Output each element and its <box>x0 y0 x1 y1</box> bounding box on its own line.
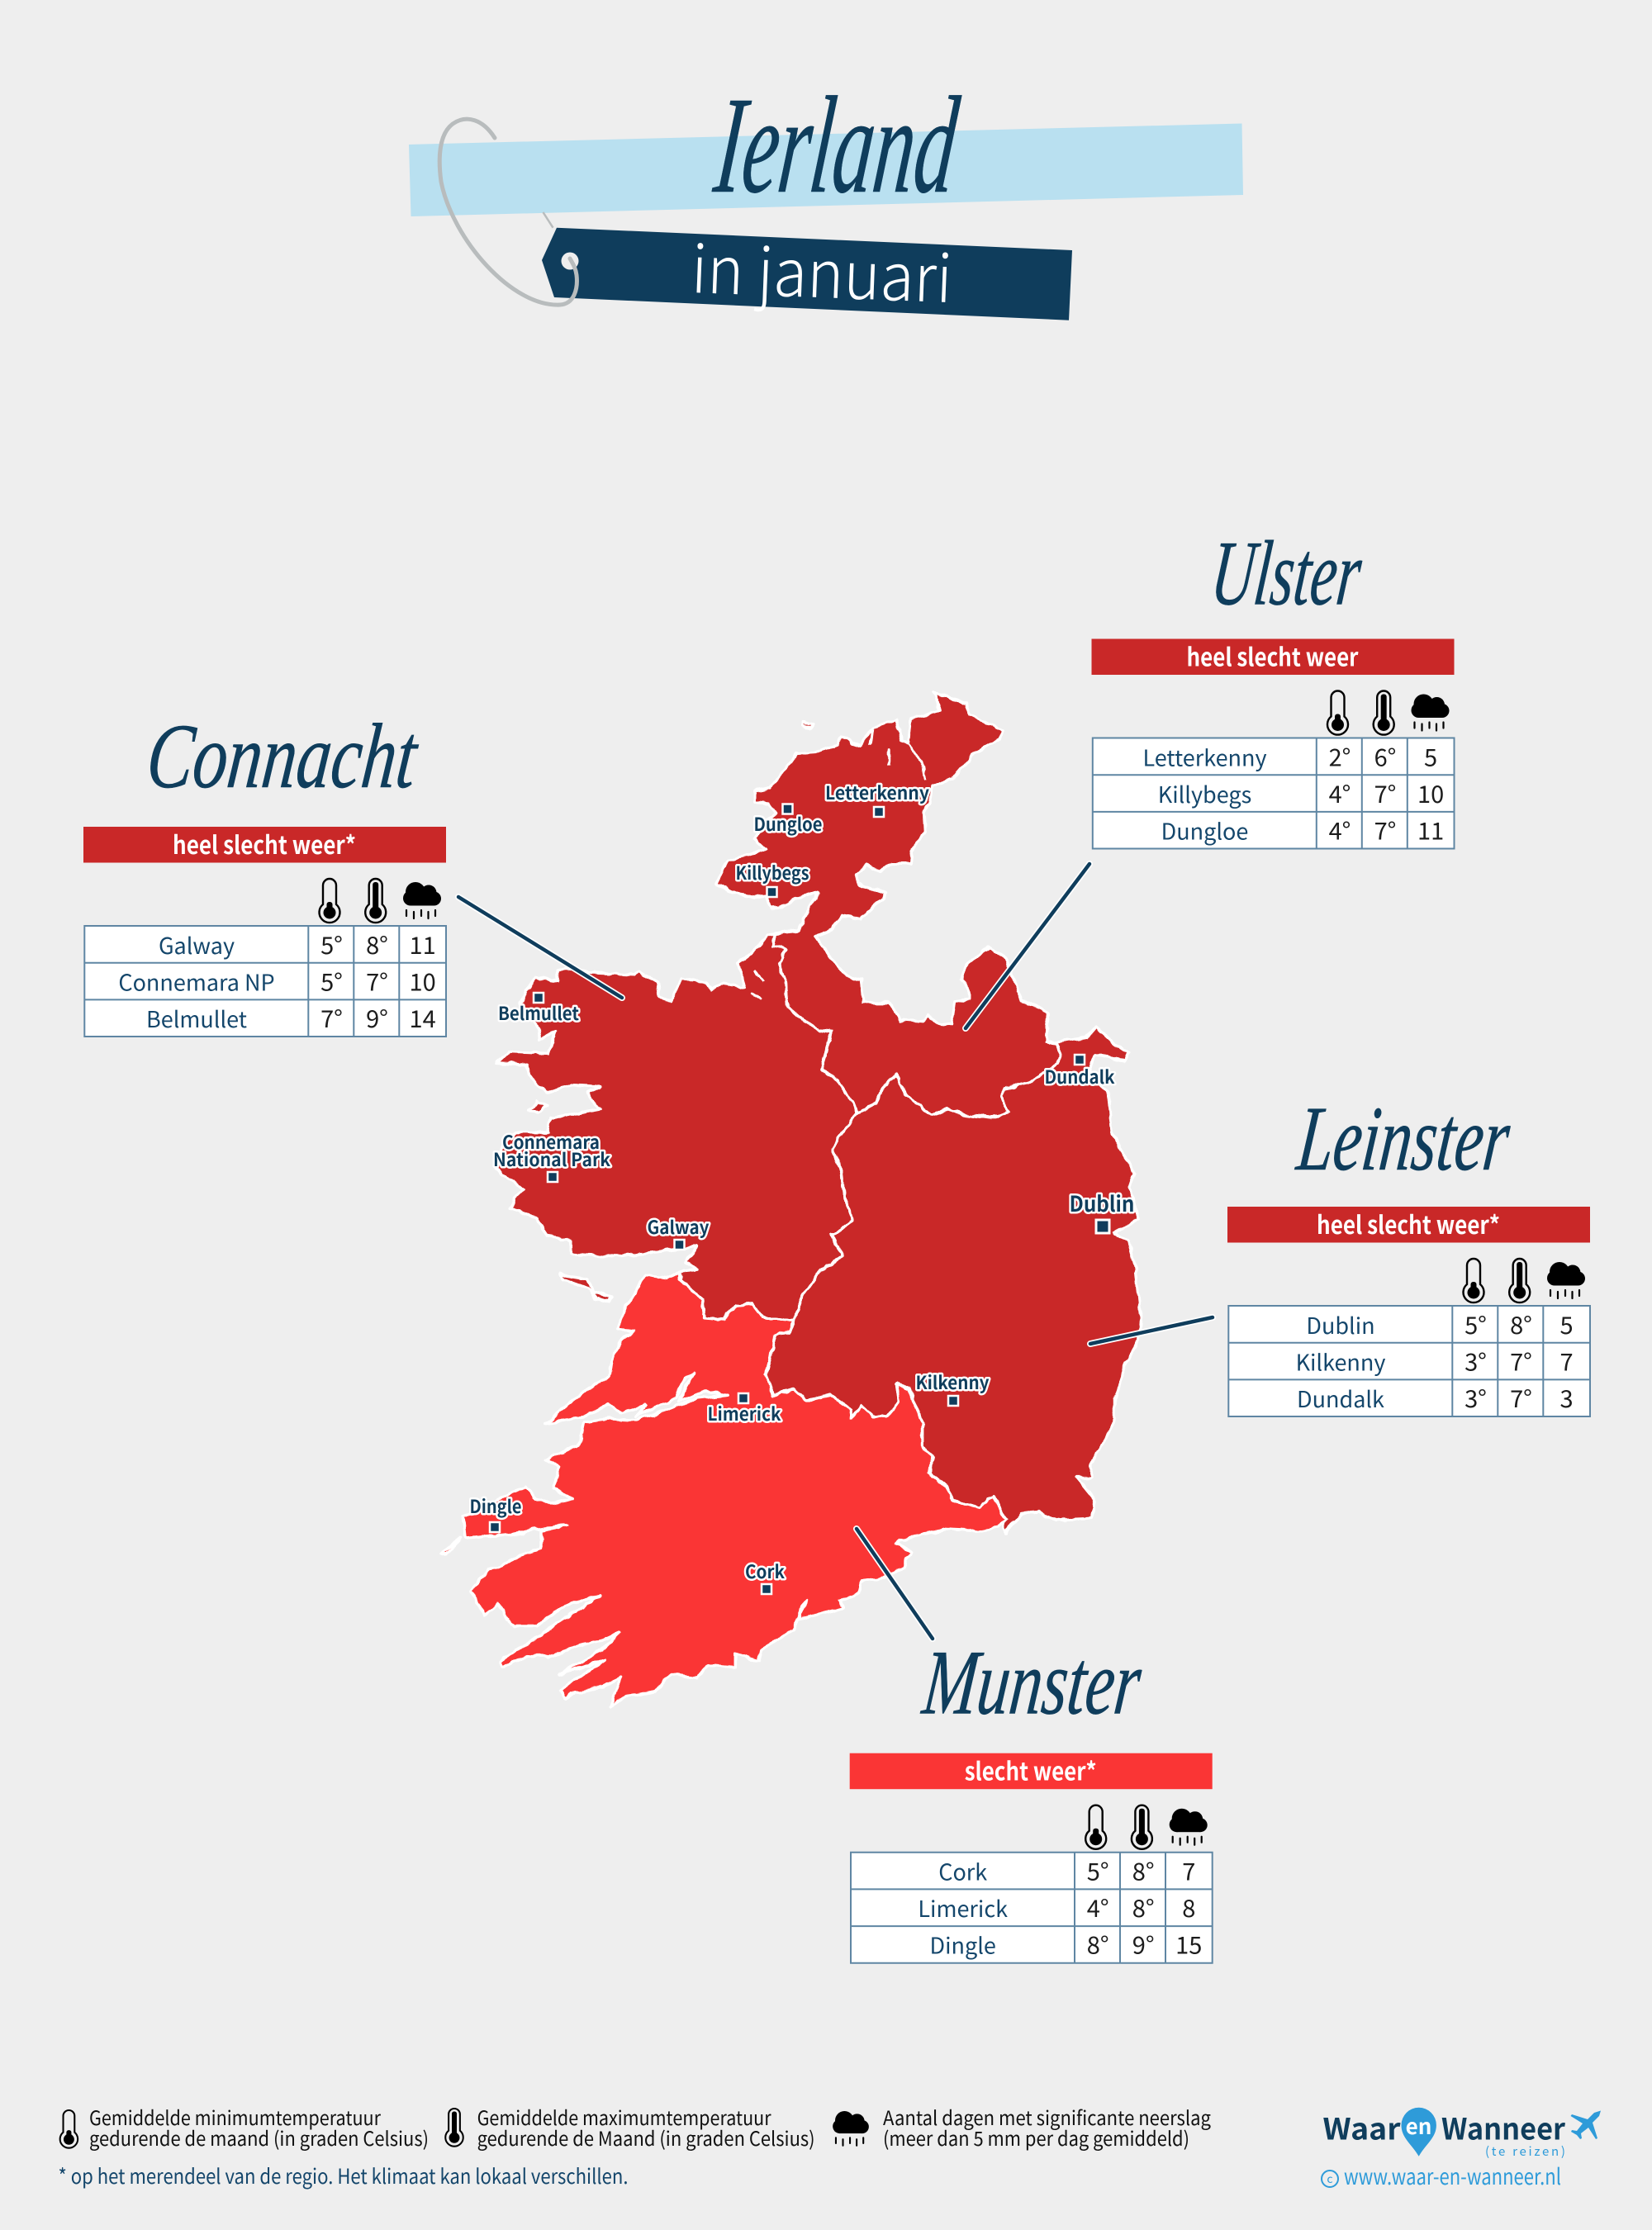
climate table: Galway <box>159 928 235 961</box>
label: Killybegs: Killybegs <box>735 859 809 885</box>
icon: max temperature <box>1374 690 1394 735</box>
marker: Cork <box>762 1584 771 1594</box>
label: Connemara National Park: National Park <box>493 1146 611 1172</box>
climate table: 5° <box>320 963 343 998</box>
callout line: Munster <box>857 1529 933 1639</box>
climate table: 7° <box>1510 1380 1532 1415</box>
climate table: 3° <box>1464 1343 1487 1378</box>
heading: Ulster: Ulster <box>1207 523 1367 624</box>
marker: Kilkenny <box>948 1396 958 1406</box>
marker: Killybegs <box>767 887 776 897</box>
icon: max temperature <box>1509 1259 1530 1302</box>
climate table: 8° <box>1510 1307 1532 1341</box>
Aran islands <box>560 1274 612 1302</box>
label: Belmullet: Belmullet <box>498 999 579 1026</box>
callout line: Connacht <box>458 897 622 998</box>
climate table: 9° <box>1132 1927 1155 1962</box>
region: Ulster <box>716 692 1061 1118</box>
Clare island <box>529 1101 547 1112</box>
legend text: min temperature: gedurende de maand (in graden Celsius) <box>89 2123 429 2152</box>
label: Dungloe: Dungloe <box>753 810 823 837</box>
climate table: Limerick <box>918 1891 1008 1924</box>
banner: weather rating <box>850 1752 1213 1789</box>
climate table: Dungloe <box>1161 814 1248 846</box>
climate table: 4° <box>1329 813 1351 847</box>
icon: rain <box>403 882 441 918</box>
climate table: 5° <box>1464 1307 1487 1341</box>
climate table: 7 <box>1560 1343 1574 1378</box>
region: Connacht <box>494 933 857 1320</box>
footnote: * op het merendeel van de regio. Het klimaat kan lokaal verschillen. <box>58 2161 628 2190</box>
climate table: 15 <box>1175 1927 1202 1962</box>
climate table: 6° <box>1374 738 1396 773</box>
region: Leinster <box>767 1027 1141 1533</box>
region: Munster <box>463 1271 1007 1706</box>
climate table: Dingle <box>930 1929 996 1961</box>
label: Connemara National Park <box>493 1128 611 1172</box>
climate table: 10 <box>1417 776 1444 810</box>
banner: weather rating <box>1227 1205 1590 1242</box>
marker: Galway <box>674 1240 684 1250</box>
icon: min temperature <box>1085 1805 1106 1849</box>
label: Dundalk: Dundalk <box>1044 1063 1115 1089</box>
icon: min temperature <box>319 879 340 923</box>
climate table: Dundalk <box>1297 1382 1384 1414</box>
climate table: 9° <box>366 1000 388 1035</box>
climate table <box>1228 1306 1590 1416</box>
label: Dingle: Dingle <box>469 1492 522 1519</box>
climate table: Connemara NP <box>118 965 275 998</box>
label: Limerick: Limerick <box>707 1400 781 1426</box>
climate table: Kilkenny <box>1296 1345 1385 1378</box>
copyright mark: c <box>1327 2171 1333 2187</box>
marker: Belmullet <box>534 993 544 1003</box>
icon: min temperature <box>1327 690 1348 735</box>
label: Dublin: Dublin <box>1069 1188 1135 1218</box>
copyright mark <box>1322 2171 1338 2187</box>
website url: www.waar-en-wanneer.nl <box>1344 2159 1561 2191</box>
legend text: min temperature: Gemiddelde minimumtemperatuur <box>89 2102 382 2131</box>
panel: Ulster <box>1092 523 1454 849</box>
legend <box>60 2102 1211 2152</box>
climate table <box>1093 738 1454 849</box>
label: Cork: Cork <box>745 1558 786 1584</box>
icon: min temperature <box>1464 1259 1483 1302</box>
climate table <box>84 926 446 1037</box>
marker: Dungloe <box>783 804 793 814</box>
Tory island <box>803 722 812 728</box>
icon: max temperature <box>1132 1805 1152 1849</box>
climate table: Cork <box>938 1855 987 1887</box>
climate table: 8° <box>1087 1927 1109 1962</box>
climate table: 10 <box>409 963 436 998</box>
climate table: 8° <box>1132 1890 1155 1924</box>
icon: rain <box>1170 1809 1208 1845</box>
banner: weather rating: slecht weer* <box>965 1752 1097 1788</box>
legend text: rain: Aantal dagen met significante neerslag <box>883 2102 1211 2131</box>
climate table: 2° <box>1329 738 1351 773</box>
climate table: 5° <box>320 927 343 961</box>
climate table: 7° <box>1510 1343 1532 1378</box>
climate table: 7° <box>1374 776 1396 810</box>
marker: Limerick <box>738 1393 748 1403</box>
title: Ierland: Ierland <box>709 69 965 222</box>
panel: Munster <box>850 1632 1213 1963</box>
legend text: rain <box>883 2102 1211 2152</box>
Lough Swilly inlet <box>871 729 925 780</box>
legend text: max temperature <box>477 2102 815 2152</box>
climate table: Killybegs <box>1158 777 1251 809</box>
legend text: max temperature: Gemiddelde maximumtemperatuur <box>477 2102 771 2131</box>
legend text: rain: (meer dan 5 mm per dag gemiddeld) <box>883 2123 1189 2152</box>
panel: Leinster <box>1227 1088 1590 1416</box>
banner: weather rating <box>83 825 446 862</box>
subtitle tag: in januari <box>690 216 954 322</box>
climate table: 4° <box>1087 1890 1109 1924</box>
logo pin: en <box>1406 2110 1431 2141</box>
climate table: 3 <box>1560 1380 1574 1415</box>
climate table: 7° <box>320 1000 343 1035</box>
climate table: 5 <box>1424 738 1437 773</box>
heading: Connacht: Connacht <box>142 705 423 808</box>
label: Kilkenny: Kilkenny <box>915 1369 990 1395</box>
banner: weather rating: heel slecht weer* <box>173 825 356 861</box>
climate table: 5 <box>1560 1307 1574 1341</box>
logo pin <box>1401 2108 1436 2156</box>
callout line: Ulster <box>966 864 1089 1028</box>
panel: Connacht <box>83 705 446 1037</box>
marker: Letterkenny <box>874 807 884 817</box>
climate table: Belmullet <box>146 1002 247 1034</box>
marker: Dundalk <box>1075 1055 1085 1065</box>
banner: weather rating: heel slecht weer* <box>1317 1205 1500 1241</box>
legend text: min temperature <box>89 2102 429 2152</box>
label: Connemara National Park: Connemara <box>502 1128 600 1155</box>
legend icon: max temperature <box>445 2109 463 2147</box>
legend text: max temperature: gedurende de Maand (in graden Celsius) <box>477 2123 815 2152</box>
legend icon: min temperature <box>60 2110 78 2148</box>
heading: Leinster: Leinster <box>1292 1088 1515 1190</box>
logo text: Wanneer: Wanneer <box>1441 2106 1565 2149</box>
title banner: light blue band <box>409 124 1243 216</box>
luggage tag string <box>544 212 553 228</box>
icon: rain <box>1547 1262 1585 1298</box>
marker: Dublin <box>1096 1220 1109 1233</box>
heading: Munster: Munster <box>918 1632 1146 1734</box>
climate table: 3° <box>1464 1380 1487 1415</box>
logo tagline: (te reizen) <box>1485 2142 1565 2160</box>
legend icon: rain <box>833 2111 869 2146</box>
climate table: 4° <box>1329 776 1351 810</box>
logo text: Waar: Waar <box>1323 2106 1401 2149</box>
climate table: Dublin <box>1306 1308 1375 1340</box>
climate table: 11 <box>409 927 436 961</box>
banner: weather rating <box>1092 638 1454 675</box>
marker: Dingle <box>490 1522 500 1532</box>
climate table: 8° <box>366 927 388 961</box>
city markers and labels <box>469 779 1135 1594</box>
climate table: 5° <box>1087 1853 1109 1888</box>
climate table: 8 <box>1182 1890 1195 1924</box>
callout line: Leinster <box>1090 1317 1213 1344</box>
climate table: 7° <box>366 963 388 998</box>
icon: rain <box>1411 694 1449 730</box>
banner: weather rating: heel slecht weer <box>1186 638 1359 674</box>
Blasket islands <box>443 1537 460 1554</box>
label: Galway: Galway <box>648 1213 710 1240</box>
climate table: 8° <box>1132 1853 1155 1888</box>
map of Ireland <box>443 692 1141 1706</box>
marker: Connemara <box>548 1172 558 1182</box>
climate table: 7 <box>1182 1853 1195 1888</box>
climate table: 14 <box>409 1000 436 1035</box>
logo icon: plane <box>1571 2111 1601 2139</box>
label: Letterkenny: Letterkenny <box>825 779 929 805</box>
climate table: 7° <box>1374 813 1396 847</box>
tag ring <box>439 119 577 305</box>
climate table <box>851 1853 1213 1963</box>
climate table: 11 <box>1417 813 1444 847</box>
subtitle tag <box>542 216 1072 322</box>
Sligo bay inlet <box>751 970 764 1000</box>
climate table: Letterkenny <box>1142 740 1267 773</box>
logo: Waar en Wanneer <box>1322 2106 1601 2191</box>
icon: max temperature <box>365 879 386 923</box>
